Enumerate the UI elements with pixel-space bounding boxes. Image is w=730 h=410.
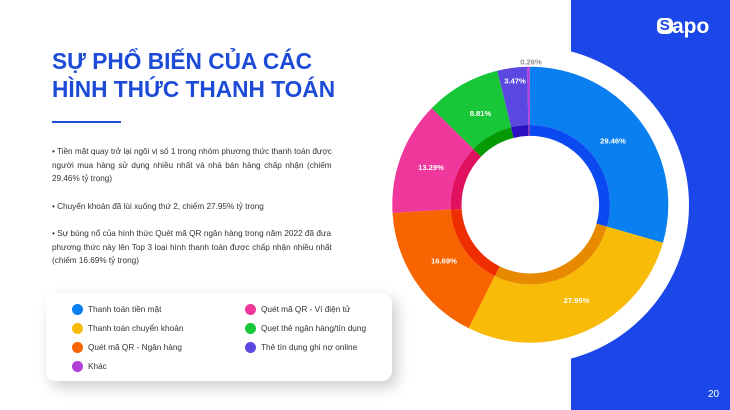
percentage labels: 8.81% xyxy=(470,109,492,118)
text block: key findings: người mua hàng sử dụng nhiều nhất và nhà bán hàng chấp nhận (chiếm xyxy=(52,161,332,170)
title: HÌNH THỨC THANH TOÁN xyxy=(52,76,335,102)
blue side panel xyxy=(571,0,730,410)
legend: Quẹt thẻ ngân hàng/tín dụng: Quẹt thẻ ngân hàng/tín dụng xyxy=(261,324,366,333)
logo: Sapo: S xyxy=(660,17,670,34)
legend: Thanh toán tiền mặt: Thanh toán tiền mặt xyxy=(88,305,161,314)
text block: key findings: (chiếm 16.69% tỷ trọng) xyxy=(52,256,139,265)
slice: Thẻ tín dụng ghi nợ online 3.47% xyxy=(421,96,639,314)
percentage labels: 29.46% xyxy=(600,136,626,146)
slice: Thanh toán tiền mặt 29.46% xyxy=(421,96,639,314)
percentage labels: 16.69% xyxy=(431,256,457,266)
slice: Quét mã QR - Ngân hàng 16.69% xyxy=(421,96,639,314)
legend: Quét mã QR - Ngân hàng xyxy=(72,342,182,353)
slice: Thanh toán chuyển khoản 27.95% xyxy=(421,96,639,314)
white circle behind donut xyxy=(371,46,689,364)
percentage labels: 13.29% xyxy=(418,163,444,172)
text block: key findings: • Sự bùng nổ của hình thức Quét mã QR ngân hàng trong năm 2022 đã đưa xyxy=(52,229,331,238)
title: SỰ PHỔ BIẾN CỦA CÁC xyxy=(52,48,312,74)
legend: Thanh toán chuyển khoản: Thanh toán chuyển khoản xyxy=(88,324,183,333)
text block: key findings: • Tiền mặt quay trở lại ngôi vị số 1 trong nhóm phương thức thanh toán được xyxy=(52,147,332,156)
legend: Khác xyxy=(72,361,107,372)
logo: Sapo: apo xyxy=(672,15,709,38)
text block: key findings xyxy=(52,147,332,265)
slice: Khác 0.26% xyxy=(421,96,639,314)
percentage labels: 0.26% xyxy=(520,58,542,66)
percentage labels: 27.95% xyxy=(564,296,590,305)
title underline xyxy=(52,121,121,123)
text block: key findings: 29.46% tỷ trọng) xyxy=(52,174,112,183)
legend card xyxy=(46,293,392,381)
title xyxy=(52,48,335,102)
slice: Quét mã QR - Ví điện tử 13.29% xyxy=(421,96,639,314)
legend: Quét mã QR - Ví điện tử xyxy=(245,304,350,315)
percentage labels xyxy=(418,58,626,305)
text block: key findings: • Chuyển khoản đã lùi xuống thứ 2, chiếm 27.95% tỷ trọng xyxy=(52,202,264,211)
text block: key findings: phương thức này lên Top 3 loại hình thanh toán được chấp nhận nhiều nhất xyxy=(52,243,332,252)
legend: Quét mã QR - Ngân hàng: Quét mã QR - Ngân hàng xyxy=(88,343,182,352)
percentage labels: 3.47% xyxy=(504,76,526,86)
slice: Quẹt thẻ ngân hàng/tín dụng 8.81% xyxy=(421,96,639,314)
legend: Thanh toán tiền mặt xyxy=(72,304,162,315)
legend: Quét mã QR - Ví điện tử: Quét mã QR - Ví điện tử xyxy=(261,305,350,314)
legend: Thẻ tín dụng ghi nợ online: Thẻ tín dụng ghi nợ online xyxy=(261,343,357,352)
legend: Khác: Khác xyxy=(88,362,107,371)
page number: 20 xyxy=(708,389,719,400)
